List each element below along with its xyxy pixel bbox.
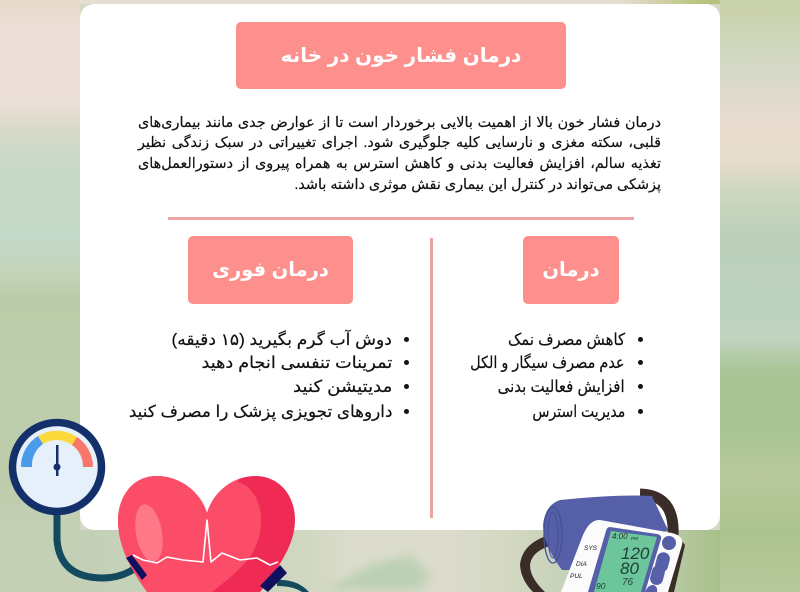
- list: treatment: [471, 331, 643, 422]
- icon: blood pressure monitor: [520, 494, 685, 592]
- heading: treatment: درمان: [542, 259, 600, 281]
- text block: introduction: تغذیه سالم، افزایش فعالیت بدنی و کاهش استرس به همراه پیروی از دستورالعمل‌های: [138, 156, 661, 172]
- list: immediate treatment: مدیتیشن کنید: [293, 378, 392, 396]
- heading: immediate treatment: [188, 236, 353, 304]
- list: treatment: افزایش فعالیت بدنی: [498, 378, 625, 396]
- title: درمان فشار خون در خانه: [281, 45, 521, 67]
- list: treatment: کاهش مصرف نمک: [508, 331, 625, 349]
- text block: introduction: درمان فشار خون بالا از اهمیت بالایی برخوردار است تا از عوارض جدی مانند بیماری‌های: [138, 115, 661, 131]
- list: immediate treatment: [128, 329, 409, 422]
- list: immediate treatment: تمرینات تنفسی انجام دهید: [201, 354, 392, 372]
- list: immediate treatment: دوش آب گرم بگیرید (۱۵ دقیقه): [172, 331, 392, 349]
- icon: blood pressure monitor: 4:00: [612, 532, 628, 541]
- icon: blood pressure monitor: PM: [631, 536, 638, 541]
- illustrations: [8, 418, 685, 592]
- icon: blood pressure monitor: 80: [620, 559, 639, 578]
- icon: blood pressure monitor: 90: [596, 581, 606, 591]
- icon: blood pressure monitor: 120: [621, 544, 650, 563]
- list: treatment: عدم مصرف سیگار و الکل: [471, 354, 625, 372]
- icon: blood pressure monitor: 76: [622, 577, 634, 588]
- heading: immediate treatment: درمان فوری: [212, 259, 329, 281]
- list: treatment: مدیریت استرس: [532, 403, 625, 421]
- icon: pressure gauge: [12, 422, 134, 578]
- text block: introduction: [137, 115, 661, 193]
- icon: blood pressure monitor: DIA: [576, 561, 587, 568]
- list: immediate treatment: داروهای تجویزی پزشک را مصرف کنید: [128, 403, 392, 421]
- title: [236, 22, 566, 89]
- icon: blood pressure monitor: SYS: [584, 545, 598, 552]
- heading: treatment: [523, 236, 619, 304]
- panel: white card: [80, 4, 720, 530]
- text block: introduction: قلبی، سکته مغزی و نارسایی کلیه جلوگیری شود. اجرای تغییراتی در سبک زندگی نظیر: [138, 135, 661, 151]
- text block: introduction: پزشکی می‌تواند در کنترل این بیماری نقش موثری داشته باشد.: [294, 177, 661, 193]
- icon: heart with ECG: [110, 470, 309, 592]
- icon: blood pressure monitor: PUL: [570, 573, 583, 580]
